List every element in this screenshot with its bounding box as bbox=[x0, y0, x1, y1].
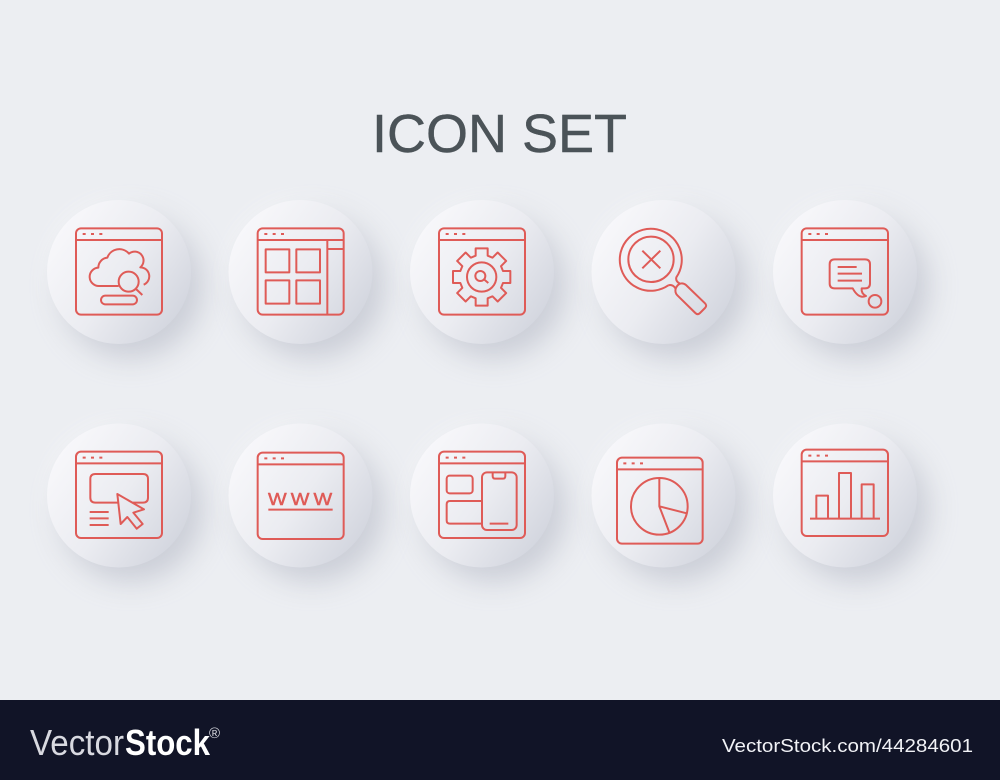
title: ICON SET bbox=[372, 104, 627, 164]
icon: browser window with www bbox=[228, 424, 372, 568]
icon: browser window with chat bubble bbox=[773, 200, 917, 344]
footer logo bbox=[30, 722, 220, 763]
footer logo: Vector bbox=[30, 722, 124, 763]
icon: browser window with gear and magnifier bbox=[410, 200, 554, 344]
icon: browser window with phone layout bbox=[410, 424, 554, 568]
footer image id: VectorStock.com/44284601 bbox=[722, 735, 973, 756]
icon: magnifier with cross bbox=[592, 200, 736, 344]
icon: browser window with www: WWW bbox=[268, 489, 336, 509]
icon: browser window with pie chart bbox=[592, 424, 736, 568]
icon: browser window with grid layout bbox=[228, 200, 372, 344]
icon: browser window with button and cursor bbox=[47, 424, 191, 568]
icon: browser window with bar chart bbox=[773, 424, 917, 568]
footer bar bbox=[0, 700, 1000, 780]
icon: browser window with cloud search bbox=[47, 200, 191, 344]
footer logo: ® bbox=[209, 725, 220, 742]
footer logo: Stock bbox=[125, 722, 211, 763]
